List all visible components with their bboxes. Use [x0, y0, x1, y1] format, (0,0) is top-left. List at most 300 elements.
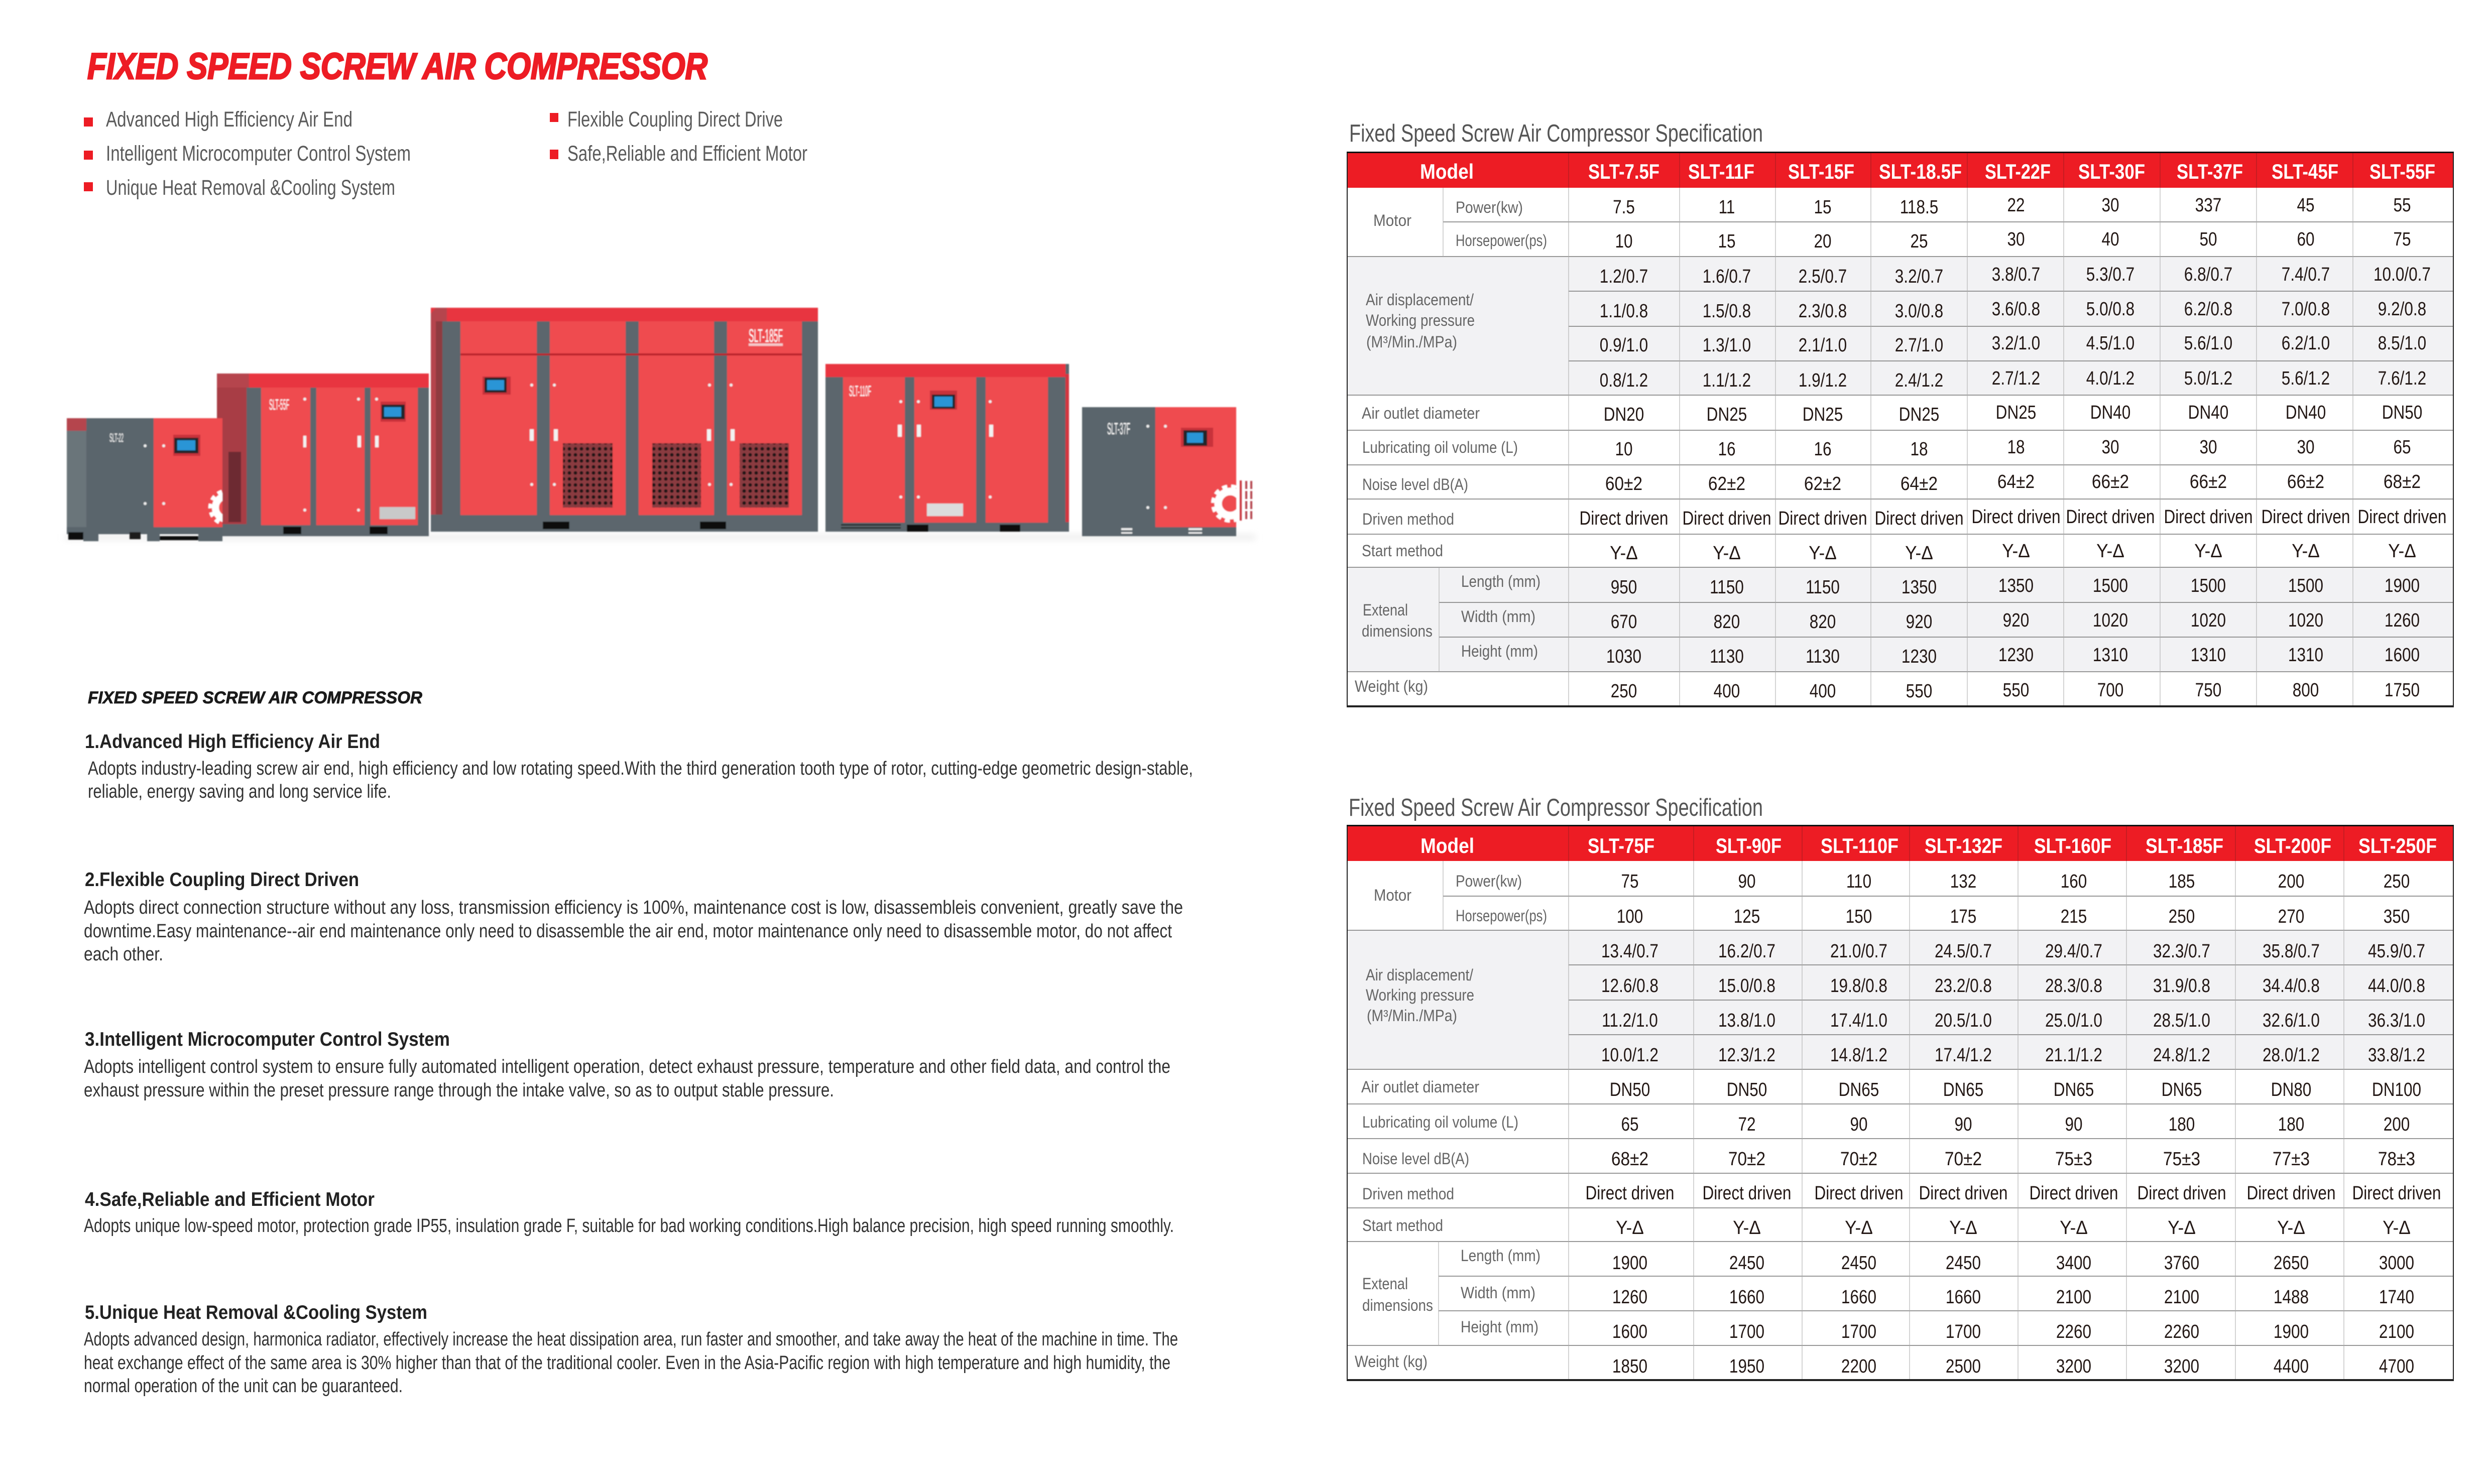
row: horsepower: 25 — [1910, 230, 1928, 252]
compressor: SLT-110F: SLT-110F — [849, 383, 871, 400]
row: height: 1130 — [1710, 646, 1744, 667]
table 1 backgrounds and grid — [1347, 152, 2454, 707]
row: length: 1150 — [1710, 576, 1744, 598]
row: driven method — [1586, 1182, 2441, 1204]
row: weight: 1850 — [1612, 1355, 1647, 1377]
row: outlet diameter: DN65 — [1839, 1079, 1879, 1100]
row: weight: 3200 — [2164, 1355, 2199, 1377]
row: displacement at 1.2: 1.1/1.2 — [1703, 369, 1751, 391]
row: length: 3400 — [2056, 1252, 2091, 1274]
row: oil volume: 18 — [1910, 438, 1928, 460]
table 1 row labels: Power(kw) — [1456, 198, 1523, 216]
row: horsepower: 125 — [1734, 906, 1760, 927]
table 2 heading: Fixed Speed Screw Air Compressor Specification — [1349, 794, 1763, 821]
row: noise: 75±3 — [2163, 1148, 2200, 1169]
row: start method: Y-Δ — [1616, 1217, 1644, 1238]
row: weight: 250 — [1611, 680, 1637, 702]
row: displacement at 1.0 — [1602, 1010, 2425, 1031]
row: length: 1500 — [2288, 575, 2323, 596]
row: length: 1900 — [2385, 575, 2420, 596]
title: FIXED SPEED SCREW AIR COMPRESSOR — [87, 46, 707, 87]
table 2 header row: SLT-90F — [1716, 834, 1782, 857]
row: noise — [1605, 471, 2421, 494]
row: outlet diameter: DN40 — [2090, 402, 2130, 423]
row: power: 185 — [2169, 871, 2195, 892]
row: displacement at 0.7: 13.4/0.7 — [1601, 940, 1658, 962]
row: noise — [1611, 1148, 2415, 1169]
row: displacement at 0.7: 29.4/0.7 — [2045, 940, 2102, 962]
row: width: 1740 — [2379, 1286, 2414, 1308]
table 1 row labels: Width (mm) — [1461, 607, 1535, 626]
row: height: 1230 — [1998, 644, 2034, 666]
row: displacement at 1.2: 14.8/1.2 — [1830, 1044, 1887, 1066]
table 2 header row: SLT-132F — [1925, 834, 2002, 857]
row: start method: Y-Δ — [1845, 1217, 1873, 1238]
row: noise: 70±2 — [1840, 1148, 1877, 1169]
row: displacement at 0.8: 1.5/0.8 — [1703, 300, 1751, 322]
row: displacement at 1.0 — [1600, 332, 2426, 356]
table 2 header row: SLT-160F — [2034, 834, 2111, 857]
row: start method: Y-Δ — [1610, 542, 1638, 563]
row: horsepower: 40 — [2101, 228, 2119, 250]
row: start method: Y-Δ — [1733, 1217, 1761, 1238]
row: horsepower: 215 — [2061, 906, 2087, 927]
row: length: 1350 — [1998, 575, 2034, 596]
table 1 header row: SLT-37F — [2177, 160, 2243, 183]
row: displacement at 1.2: 12.3/1.2 — [1718, 1044, 1775, 1066]
row: driven method: Direct driven — [1919, 1182, 2007, 1204]
row: noise: 78±3 — [2378, 1148, 2415, 1169]
row: weight: 550 — [2003, 679, 2029, 701]
row: start method: Y-Δ — [2383, 1217, 2411, 1238]
row: displacement at 0.7: 5.3/0.7 — [2086, 264, 2134, 285]
row: weight: 4700 — [2379, 1355, 2414, 1377]
table 2 row labels: Air outlet diameter — [1361, 1078, 1479, 1096]
row: length: 1500 — [2191, 575, 2226, 596]
row: displacement at 0.8: 1.1/0.8 — [1600, 300, 1648, 322]
row: horsepower: 30 — [2007, 228, 2025, 250]
table 1 row labels: Length (mm) — [1461, 572, 1540, 590]
row: displacement at 1.2: 33.8/1.2 — [2368, 1044, 2425, 1066]
row: outlet diameter: DN50 — [1727, 1079, 1767, 1100]
row: start method: Y-Δ — [2096, 540, 2124, 561]
row: displacement at 1.2: 0.8/1.2 — [1600, 369, 1648, 391]
row: driven method: Direct driven — [2358, 506, 2446, 528]
row: driven method: Direct driven — [2352, 1182, 2441, 1204]
table 2 row labels: Extenal — [1362, 1275, 1408, 1293]
row: power: 22 — [2007, 194, 2025, 216]
row: power: 132 — [1950, 871, 1976, 892]
row: width — [1612, 1286, 2414, 1308]
row: weight: 4400 — [2274, 1355, 2309, 1377]
table 2 row labels: Air displacement/ — [1366, 966, 1473, 984]
row: displacement at 0.8: 34.4/0.8 — [2263, 975, 2320, 997]
row: width: 2100 — [2164, 1286, 2199, 1308]
row: displacement at 1.2: 24.8/1.2 — [2153, 1044, 2210, 1066]
table 2 header row: SLT-185F — [2146, 834, 2223, 857]
row: horsepower: 15 — [1718, 230, 1736, 252]
row: oil volume — [1621, 1114, 2410, 1135]
row: displacement at 0.8: 3.0/0.8 — [1895, 300, 1943, 322]
table 2 header row: SLT-250F — [2358, 834, 2437, 857]
table 1 values — [1580, 194, 2446, 702]
row: length: 3760 — [2164, 1252, 2199, 1274]
row: displacement at 0.7: 35.8/0.7 — [2263, 940, 2320, 962]
row: outlet diameter: DN20 — [1604, 404, 1644, 425]
row: outlet diameter: DN65 — [2162, 1079, 2202, 1100]
row: oil volume: 200 — [2384, 1114, 2410, 1135]
feature 2 text: Adopts direct connection structure without any loss, transmission efficiency is 100%, maintenance cost is low, disassembleis convenient, greatly save the — [84, 897, 1183, 918]
row: weight: 700 — [2097, 679, 2123, 701]
table 2 row labels: Power(kw) — [1456, 872, 1522, 890]
table 1 header row: SLT-30F — [2078, 160, 2145, 183]
row: displacement at 1.0: 3.2/1.0 — [1992, 332, 2040, 354]
row: displacement at 1.0: 20.5/1.0 — [1935, 1010, 1992, 1031]
row: displacement at 0.8: 6.2/0.8 — [2184, 298, 2232, 320]
row: length: 1900 — [1612, 1252, 1647, 1274]
row: driven method: Direct driven — [2262, 506, 2350, 528]
row: noise: 70±2 — [1945, 1148, 1982, 1169]
row: start method — [1610, 540, 2416, 563]
feature 2 text: downtime.Easy maintenance--air end maintenance only need to disassemble the air end, motor maintenance only need to disassemble motor, do not affect — [84, 921, 1172, 942]
row: displacement at 1.2: 2.4/1.2 — [1895, 369, 1943, 391]
row: start method: Y-Δ — [2168, 1217, 2196, 1238]
bullet: control system: Intelligent Microcomputer Control System — [106, 142, 411, 166]
row: height: 2260 — [2056, 1321, 2091, 1342]
row: weight: 2500 — [1946, 1355, 1981, 1377]
row: displacement at 1.0: 17.4/1.0 — [1830, 1010, 1887, 1031]
row: noise: 66±2 — [2190, 471, 2227, 492]
row: oil volume: 18 — [2007, 436, 2025, 458]
row: start method: Y-Δ — [2194, 540, 2222, 561]
compressor: SLT-22F small: SLT-22 — [109, 431, 124, 445]
feature 4 text: Adopts unique low-speed motor, protection grade IP55, insulation grade F, suitable for bad working conditions.High balance precision, high speed running smoothly. — [84, 1215, 1174, 1236]
row: driven method: Direct driven — [1972, 506, 2060, 528]
row: height: 1310 — [2288, 644, 2323, 666]
row: width: 1020 — [2191, 609, 2226, 631]
row: displacement at 1.2: 5.0/1.2 — [2184, 367, 2232, 389]
table 1 row labels: Air outlet diameter — [1362, 404, 1480, 422]
row: length: 1500 — [2093, 575, 2128, 596]
row: driven method: Direct driven — [1580, 508, 1668, 529]
compressor: SLT-55F: SLT-55F — [269, 397, 289, 413]
row: driven method: Direct driven — [2164, 506, 2252, 528]
row: oil volume: 65 — [2393, 436, 2411, 458]
table 2 row labels — [1355, 872, 1547, 1371]
compressor: SLT-110F — [825, 364, 1069, 532]
table 1 header row: SLT-45F — [2272, 160, 2338, 183]
feature 3 text: 3.Intelligent Microcomputer Control System — [85, 1029, 450, 1050]
row: displacement at 1.2: 2.7/1.2 — [1992, 367, 2040, 389]
row: height: 1600 — [2385, 644, 2420, 666]
row: oil volume: 30 — [2199, 436, 2217, 458]
table 1 row labels: Start method — [1362, 542, 1443, 560]
table 2 header row: Model — [1420, 834, 1474, 857]
row: noise: 68±2 — [1611, 1148, 1648, 1169]
row: width: 920 — [2003, 609, 2029, 631]
table 2 values — [1586, 871, 2441, 1377]
feature 4 text: 4.Safe,Reliable and Efficient Motor — [85, 1189, 375, 1210]
table 2 row labels: Horsepower(ps) — [1456, 907, 1547, 925]
row: displacement at 0.8: 12.6/0.8 — [1601, 975, 1658, 997]
table 1 row labels: Driven method — [1362, 510, 1454, 528]
row: displacement at 1.0: 32.6/1.0 — [2263, 1010, 2320, 1031]
table 1 row labels: Weight (kg) — [1355, 677, 1428, 695]
row: horsepower — [1617, 906, 2410, 927]
row: displacement at 1.0: 36.3/1.0 — [2368, 1010, 2425, 1031]
row: driven method: Direct driven — [2138, 1182, 2226, 1204]
row: width: 920 — [1906, 611, 1932, 633]
row: displacement at 0.8: 5.0/0.8 — [2086, 298, 2134, 320]
row: start method: Y-Δ — [1905, 542, 1933, 563]
table 1 row labels: dimensions — [1362, 622, 1433, 640]
row: displacement at 1.0: 2.1/1.0 — [1799, 334, 1847, 356]
table 1 row labels — [1355, 198, 1547, 695]
row: height: 1700 — [1729, 1321, 1764, 1342]
feature 3 text — [84, 1029, 1170, 1101]
row: length: 950 — [1611, 576, 1637, 598]
row: displacement at 0.8 — [1600, 298, 2426, 322]
table 2 row labels: Height (mm) — [1461, 1318, 1538, 1336]
feature 5 text: Adopts advanced design, harmonica radiator, effectively increase the heat dissipation area, run faster and smoother, and take away the heat of the machine in time. The — [84, 1329, 1178, 1350]
row: outlet diameter — [1610, 1079, 2421, 1100]
row: noise: 60±2 — [1605, 473, 1642, 494]
row: driven method: Direct driven — [1815, 1182, 1903, 1204]
row: weight: 400 — [1714, 680, 1740, 702]
row: weight: 1950 — [1729, 1355, 1764, 1377]
row: width: 1660 — [1946, 1286, 1981, 1308]
row: outlet diameter: DN50 — [1610, 1079, 1650, 1100]
bullet: air end: Advanced High Efficiency Air End — [106, 107, 352, 132]
row: horsepower: 60 — [2297, 228, 2315, 250]
row: displacement at 1.0: 4.5/1.0 — [2086, 332, 2134, 354]
row: width: 1660 — [1841, 1286, 1876, 1308]
row: horsepower: 75 — [2393, 228, 2411, 250]
row: power: 15 — [1814, 196, 1832, 218]
feature 1 text — [85, 731, 1193, 802]
row: height — [1606, 644, 2420, 667]
row: driven method: Direct driven — [1778, 508, 1867, 529]
row: horsepower: 350 — [2384, 906, 2410, 927]
row: outlet diameter — [1604, 402, 2422, 425]
row: weight: 400 — [1810, 680, 1836, 702]
table 1 row labels: Horsepower(ps) — [1456, 231, 1547, 250]
row: displacement at 1.2: 1.9/1.2 — [1799, 369, 1847, 391]
table 2 row labels: Motor — [1374, 886, 1411, 904]
row: noise: 62±2 — [1708, 473, 1745, 494]
row: displacement at 0.7: 7.4/0.7 — [2282, 264, 2330, 285]
product photo: compressor line-up — [65, 308, 1255, 541]
row: displacement at 1.0: 1.3/1.0 — [1703, 334, 1751, 356]
row: start method: Y-Δ — [1949, 1217, 1977, 1238]
feature 5 text: heat exchange effect of the same area is 30% higher than that of the traditional cooler. Even in the Asia-Pacific region with high temperature and high humidity, the — [84, 1352, 1170, 1374]
feature 2 text: 2.Flexible Coupling Direct Driven — [85, 869, 359, 891]
table 1 row labels: Lubricating oil volume (L) — [1362, 438, 1518, 456]
compressor: SLT-185F large — [431, 308, 818, 532]
table 1 header row — [1420, 160, 2435, 183]
row: driven method: Direct driven — [1875, 508, 1963, 529]
row: displacement at 0.7: 32.3/0.7 — [2153, 940, 2210, 962]
row: horsepower: 270 — [2278, 906, 2304, 927]
row: outlet diameter: DN25 — [1803, 404, 1843, 425]
row: displacement at 0.8: 2.3/0.8 — [1799, 300, 1847, 322]
feature 2 text: each other. — [84, 944, 163, 965]
row: displacement at 0.8: 19.8/0.8 — [1830, 975, 1887, 997]
bullet: motor: Safe,Reliable and Efficient Motor — [567, 142, 807, 166]
row: noise: 75±3 — [2055, 1148, 2092, 1169]
feature 1 text: reliable, energy saving and long service life. — [88, 781, 391, 802]
row: oil volume: 180 — [2169, 1114, 2195, 1135]
compressor: SLT-37F: SLT-37F — [1107, 420, 1130, 438]
row: displacement at 0.7: 45.9/0.7 — [2368, 940, 2425, 962]
row: oil volume — [1615, 436, 2411, 460]
row: noise: 68±2 — [2384, 471, 2421, 492]
row: oil volume: 30 — [2101, 436, 2119, 458]
row: outlet diameter: DN65 — [2054, 1079, 2094, 1100]
row: height: 1030 — [1606, 646, 1641, 667]
row: height: 2100 — [2379, 1321, 2414, 1342]
table 2 header row — [1420, 834, 2437, 857]
row: noise: 64±2 — [1997, 471, 2035, 492]
row: start method: Y-Δ — [2388, 540, 2416, 561]
row: displacement at 0.7: 16.2/0.7 — [1718, 940, 1775, 962]
row: displacement at 1.0: 6.2/1.0 — [2282, 332, 2330, 354]
row: weight — [1612, 1355, 2414, 1377]
row: noise: 64±2 — [1901, 473, 1938, 494]
row: displacement at 1.2: 17.4/1.2 — [1935, 1044, 1992, 1066]
row: start method: Y-Δ — [2292, 540, 2320, 561]
row: displacement at 0.7: 3.2/0.7 — [1895, 266, 1943, 287]
row: displacement at 1.2: 5.6/1.2 — [2282, 367, 2330, 389]
row: weight: 800 — [2293, 679, 2319, 701]
row: length — [1612, 1252, 2414, 1274]
row: displacement at 1.0: 5.6/1.0 — [2184, 332, 2232, 354]
row: displacement at 1.0: 0.9/1.0 — [1600, 334, 1648, 356]
row: displacement at 0.8: 3.6/0.8 — [1992, 298, 2040, 320]
row: displacement at 0.7: 2.5/0.7 — [1799, 266, 1847, 287]
row: weight: 550 — [1906, 680, 1932, 702]
compressor: SLT-37F — [1082, 407, 1252, 536]
row: power: 200 — [2278, 871, 2304, 892]
row: displacement at 1.2: 7.6/1.2 — [2378, 367, 2426, 389]
row: oil volume: 180 — [2278, 1114, 2304, 1135]
row: weight: 750 — [2195, 679, 2221, 701]
row: displacement at 0.7: 1.6/0.7 — [1703, 266, 1751, 287]
row: horsepower: 150 — [1846, 906, 1872, 927]
feature 5 text: normal operation of the unit can be guaranteed. — [84, 1376, 403, 1397]
table 2 row labels: Weight (kg) — [1355, 1352, 1428, 1371]
row: weight: 1750 — [2385, 679, 2420, 701]
row: power: 110 — [1846, 871, 1871, 892]
row: height — [1612, 1321, 2414, 1342]
table 1 header row: SLT-7.5F — [1588, 160, 1659, 183]
row: oil volume: 30 — [2297, 436, 2315, 458]
row: oil volume: 90 — [2065, 1114, 2083, 1135]
compressor: SLT-55F — [217, 374, 429, 536]
row: height: 2260 — [2164, 1321, 2199, 1342]
feature 3 text: exhaust pressure within the preset pressure range through the intake valve, so as to output stable pressure. — [84, 1080, 834, 1101]
table 1 row labels: (M³/Min./MPa) — [1366, 333, 1457, 351]
row: displacement at 0.7: 6.8/0.7 — [2184, 264, 2232, 285]
table 2 header row: SLT-110F — [1821, 834, 1899, 857]
table 1 row labels: Height (mm) — [1461, 642, 1538, 660]
row: power: 90 — [1738, 871, 1756, 892]
row: power: 11 — [1719, 196, 1735, 218]
row: power: 75 — [1621, 871, 1639, 892]
row: displacement at 0.7 — [1601, 940, 2425, 962]
row: height: 1130 — [1806, 646, 1840, 667]
table 2 backgrounds and grid — [1347, 825, 2454, 1381]
row: outlet diameter: DN25 — [1899, 404, 1939, 425]
row: length: 2450 — [1729, 1252, 1764, 1274]
row: outlet diameter: DN80 — [2271, 1079, 2311, 1100]
row: height: 1230 — [1902, 646, 1937, 667]
feature bullet list — [84, 107, 807, 200]
row: power: 160 — [2061, 871, 2087, 892]
specification table 1 — [1347, 152, 2454, 707]
row: power — [1621, 871, 2410, 892]
section title: FIXED SPEED SCREW AIR COMPRESSOR — [88, 688, 422, 707]
row: displacement at 1.2: 10.0/1.2 — [1601, 1044, 1658, 1066]
table 2 row labels: Length (mm) — [1461, 1247, 1540, 1265]
row: displacement at 0.8: 7.0/0.8 — [2282, 298, 2330, 320]
table 2 row labels: Width (mm) — [1461, 1284, 1535, 1302]
row: displacement at 0.8: 9.2/0.8 — [2378, 298, 2426, 320]
row: height: 1700 — [1841, 1321, 1876, 1342]
row: width: 820 — [1810, 611, 1836, 633]
row: width: 1020 — [2093, 609, 2128, 631]
row: displacement at 0.8: 44.0/0.8 — [2368, 975, 2425, 997]
table 2 row labels: Working pressure — [1366, 986, 1474, 1004]
feature 5 text — [84, 1302, 1178, 1397]
row: displacement at 1.0: 11.2/1.0 — [1602, 1010, 1658, 1031]
table 1 heading: Fixed Speed Screw Air Compressor Specification — [1349, 120, 1763, 147]
row: noise: 70±2 — [1728, 1148, 1765, 1169]
row: displacement at 1.0: 28.5/1.0 — [2153, 1010, 2210, 1031]
row: driven method: Direct driven — [2030, 1182, 2118, 1204]
row: width: 1020 — [2288, 609, 2323, 631]
row: displacement at 1.2: 4.0/1.2 — [2086, 367, 2134, 389]
row: oil volume: 16 — [1814, 438, 1832, 460]
row: noise: 62±2 — [1804, 473, 1841, 494]
row: width: 670 — [1611, 611, 1637, 633]
row: power: 7.5 — [1613, 196, 1635, 218]
table 2 row labels: Driven method — [1362, 1185, 1454, 1203]
row: noise: 77±3 — [2273, 1148, 2310, 1169]
table 2 row labels: Start method — [1362, 1216, 1443, 1234]
row: width: 1260 — [1612, 1286, 1647, 1308]
row: outlet diameter: DN40 — [2286, 402, 2326, 423]
row: displacement at 0.8: 23.2/0.8 — [1935, 975, 1992, 997]
row: start method — [1616, 1217, 2411, 1238]
table 1 header row: Model — [1420, 160, 1474, 183]
row: displacement at 1.2 — [1600, 367, 2426, 391]
row: width: 1488 — [2274, 1286, 2309, 1308]
row: displacement at 0.7: 10.0/0.7 — [2374, 264, 2431, 285]
table 1 header row: SLT-11F — [1688, 160, 1754, 183]
bullet: coupling: Flexible Coupling Direct Drive — [567, 107, 783, 132]
row: driven method: Direct driven — [1683, 508, 1771, 529]
row: power: 250 — [2384, 871, 2410, 892]
specification table 2 — [1347, 825, 2454, 1381]
row: height: 1310 — [2191, 644, 2226, 666]
table 2 header row: SLT-200F — [2254, 834, 2331, 857]
row: height: 1900 — [2274, 1321, 2309, 1342]
row: height: 1600 — [1612, 1321, 1647, 1342]
row: oil volume: 90 — [1850, 1114, 1868, 1135]
row: horsepower: 100 — [1617, 906, 1643, 927]
row: driven method: Direct driven — [1586, 1182, 1674, 1204]
